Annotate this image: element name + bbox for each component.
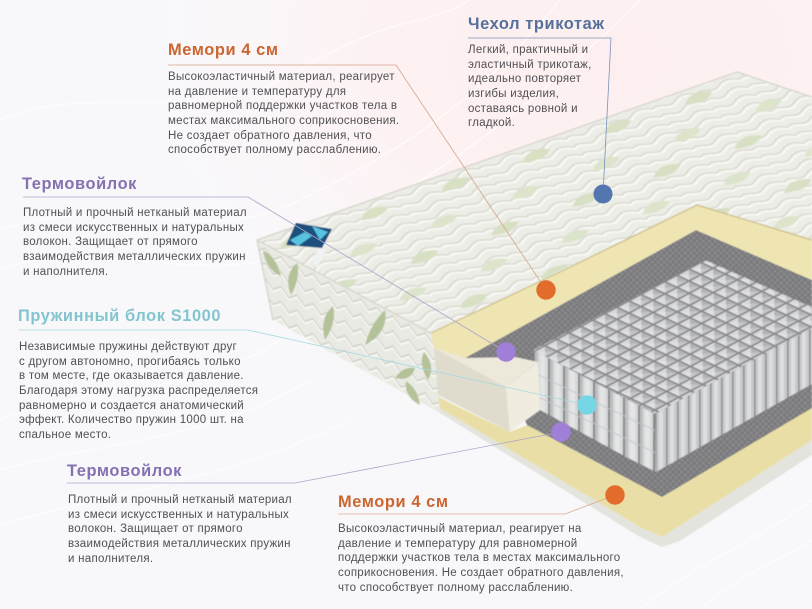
body: upper insulator: волокон. Защищает от прямого (23, 236, 198, 248)
text block: lower insulator (67, 462, 292, 564)
body: spring block: с другом автономно, прогибаясь только (19, 356, 241, 368)
marker: cover (594, 184, 612, 204)
body: lower insulator: из смеси искусственных и натуральных (68, 509, 289, 521)
heading: spring block: Пружинный блок S1000 (18, 307, 221, 325)
body: spring block: Независимые пружины действуют друг (19, 341, 237, 353)
foam rim shade (431, 205, 812, 333)
leader line: top memory (168, 65, 546, 290)
body: spring block: спальное место. (19, 429, 111, 441)
body: lower memory foam: поддержки участков тела в местах максимального (338, 552, 620, 564)
body: lower insulator: Плотный и прочный нетканый материал (68, 494, 292, 506)
text block: lower memory foam (338, 493, 624, 594)
text block: cover (468, 15, 605, 129)
heading: upper insulator: Термовойлок (22, 175, 137, 193)
marker: top memory (536, 280, 556, 300)
cover piping edge (257, 72, 812, 333)
body: top memory foam: местах максимального соприкосновения. (168, 115, 399, 127)
bottom cover (436, 395, 812, 547)
body: top memory foam: способствует полному расслаблению. (168, 144, 381, 156)
body: upper insulator: из смеси искусственных и натуральных (23, 222, 244, 234)
body: top memory foam: равномерной поддержки участков тела в (168, 100, 397, 112)
body: upper insulator: Плотный и прочный нетканый материал (23, 207, 247, 219)
text block: top memory foam (168, 41, 399, 156)
body: lower insulator (68, 494, 292, 564)
mattress (257, 72, 812, 547)
body: lower memory foam (338, 523, 624, 594)
leader line: lower insulator (67, 432, 561, 483)
spring block top (533, 260, 812, 414)
body: cover (468, 44, 592, 129)
mattress label (286, 223, 332, 268)
heading: lower memory foam: Мемори 4 см (338, 493, 449, 511)
body: cover: Легкий, практичный и (468, 44, 588, 56)
body: cover: идеально повторяет (468, 73, 581, 85)
body: lower memory foam: что способствует полному расслаблению. (338, 582, 573, 594)
body: top memory foam (168, 71, 399, 156)
leader line: upper insulator (23, 197, 506, 352)
body: upper insulator (23, 207, 247, 278)
leader line: cover (468, 38, 611, 194)
body: spring block: равномерно и создается анатомический (19, 400, 244, 412)
text block: spring block (18, 307, 258, 441)
spring block front left (533, 350, 656, 472)
marker: lower memory (605, 485, 625, 505)
felt insulator (465, 230, 812, 497)
body: upper insulator: взаимодействия металлических пружин (23, 251, 246, 263)
body: cover: оставаясь ровной и (468, 102, 578, 114)
text block: upper insulator (22, 175, 247, 278)
heading: lower insulator: Термовойлок (67, 462, 182, 480)
heading: cover: Чехол трикотаж (468, 15, 605, 33)
body: lower memory foam: Высокоэластичный материал, реагирует на (338, 523, 582, 535)
leader line: spring block (19, 330, 587, 405)
body: spring block: эффект. Количество пружин 1000 шт. на (19, 414, 244, 426)
body: spring block: в том месте, где оказывается давление. (19, 370, 244, 382)
body: spring block (19, 341, 258, 441)
cream foam block (434, 348, 540, 432)
body: lower insulator: волокон. Защищает от прямого (68, 523, 243, 535)
marker: upper insulator (496, 342, 516, 362)
spring block front right (655, 328, 812, 472)
quilted top cover (257, 72, 812, 333)
body: cover: изгибы изделия, (468, 88, 559, 100)
body: cover: эластичный трикотаж, (468, 59, 592, 71)
marker: lower insulator (551, 422, 571, 442)
body: spring block: Благодаря этому нагрузка распределяется (19, 385, 258, 397)
side leaves (263, 250, 431, 405)
body: top memory foam: Не создает обратного давления, что (168, 130, 372, 142)
body: lower insulator: и наполнителя. (68, 552, 153, 564)
upper memory foam layer (431, 205, 812, 358)
body: top memory foam: Высокоэластичный материал, реагирует (168, 71, 395, 83)
body: lower memory foam: давление и температуру для равномерной (338, 538, 578, 550)
body: top memory foam: на давление и температуру для (168, 86, 346, 98)
mattress side panel (257, 240, 440, 413)
heading: top memory foam: Мемори 4 см (168, 41, 279, 59)
body: cover: гладкой. (468, 117, 515, 129)
body: upper insulator: и наполнителя. (23, 266, 108, 278)
leaf print on cover (257, 72, 812, 333)
body: lower insulator: взаимодействия металлических пружин (68, 538, 291, 550)
leader line: lower memory (338, 495, 615, 514)
marker: spring block (577, 395, 597, 415)
body: lower memory foam: соприкосновения. Не создает обратного давления, (338, 567, 624, 579)
lower memory foam layer (438, 397, 812, 537)
